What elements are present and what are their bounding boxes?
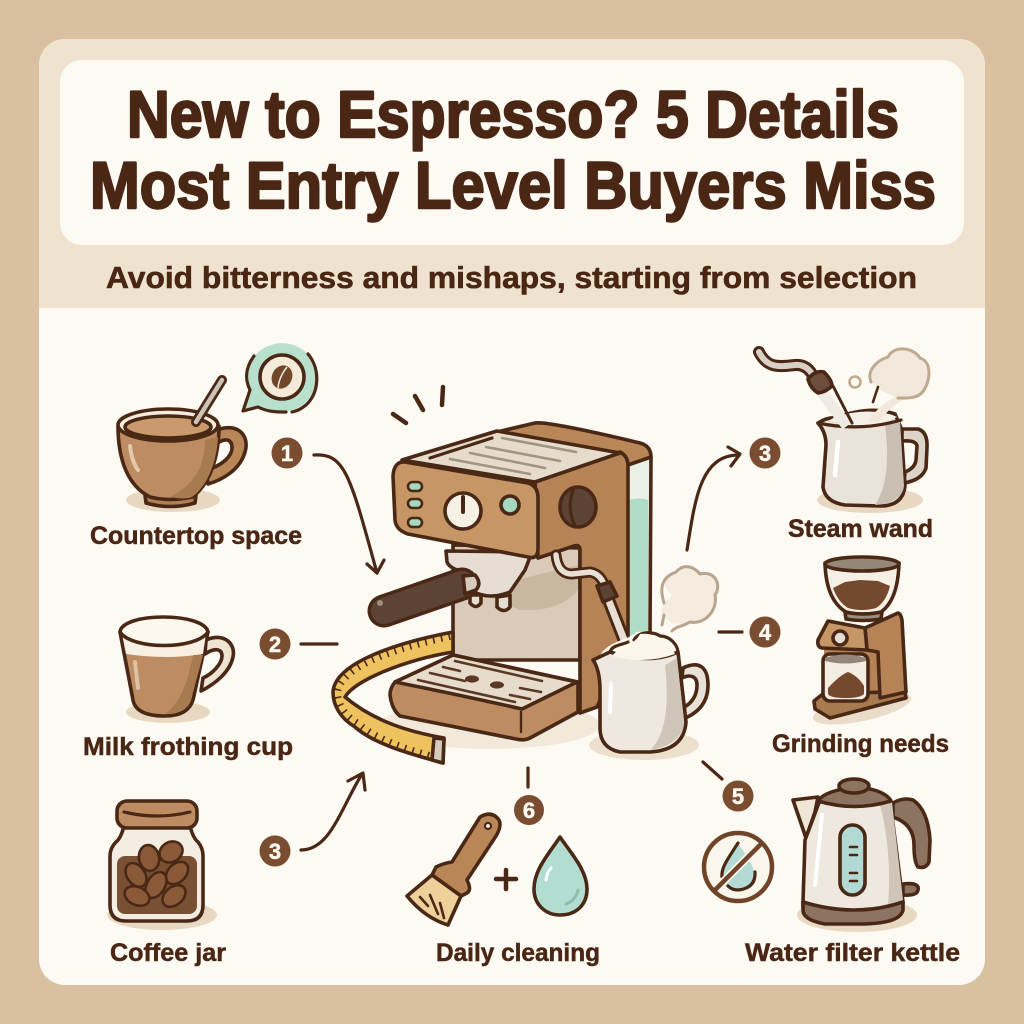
indicator light <box>501 496 519 514</box>
back top <box>497 423 651 465</box>
grinder front <box>818 621 867 650</box>
title box <box>60 60 964 245</box>
label: grinding needs: Grinding needs <box>772 730 949 758</box>
espresso machine shadow <box>380 701 699 760</box>
badge: number 5 <box>722 780 754 812</box>
icon: coffee jar <box>107 801 217 930</box>
icon: water drop <box>534 837 587 915</box>
icon: spark lines <box>393 387 443 423</box>
title: New to Espresso? 5 Details <box>127 77 899 151</box>
front panel <box>393 462 538 558</box>
subtitle: Avoid bitterness and mishaps, starting from selection <box>106 260 917 295</box>
drip tray <box>390 655 578 740</box>
label: water filter kettle: Water filter kettle <box>745 939 960 967</box>
water tank <box>622 457 651 640</box>
badge: number 2 <box>260 628 290 660</box>
icon: grinder <box>810 557 914 731</box>
line: 2 <box>301 642 337 646</box>
portafilter <box>377 575 479 611</box>
badge: number 6: 6 <box>523 798 535 823</box>
badge: number 3 right: 3 <box>759 441 771 466</box>
buttons <box>408 482 422 527</box>
label: daily cleaning: Daily cleaning <box>436 939 600 967</box>
icon: water filter kettle <box>793 779 930 932</box>
badge: number 6 <box>514 795 544 825</box>
machine column <box>535 452 628 713</box>
label: countertop space: Countertop space <box>90 522 302 550</box>
badge: number 2: 2 <box>269 632 281 657</box>
icon: no water sign <box>704 833 772 901</box>
dial <box>445 493 481 529</box>
side knob <box>560 487 596 527</box>
label: milk frothing cup: Milk frothing cup <box>83 733 293 761</box>
badge: number 4: 4 <box>759 620 772 645</box>
steam wand <box>556 555 628 650</box>
icon: frothing pitcher <box>593 632 708 752</box>
line: 4 <box>719 630 742 634</box>
grinder body backing <box>824 648 884 698</box>
badge: number 3 left <box>260 836 290 866</box>
icon: countertop cup <box>118 380 246 512</box>
label: coffee jar: Coffee jar <box>110 939 226 967</box>
badge: number 1 <box>272 438 302 468</box>
badge: number 3 right <box>750 438 780 468</box>
badge: number 4 <box>750 616 780 648</box>
icon: steam wand <box>759 352 852 426</box>
icon: steam wand pitcher <box>817 410 927 513</box>
icon: steam cloud <box>662 567 718 631</box>
line: 6 <box>526 768 530 787</box>
badge: number 5: 5 <box>732 784 744 809</box>
icon: espresso machine <box>377 423 651 740</box>
plus sign <box>496 870 516 889</box>
icon: milk frothing cup <box>120 617 233 723</box>
icon: steam <box>850 349 929 422</box>
icon: brush <box>407 814 500 925</box>
grinder side <box>865 613 906 698</box>
label: steam wand: Steam wand <box>788 515 933 543</box>
arrow: 3 to steam wand <box>687 447 740 550</box>
back panel <box>453 545 580 660</box>
arrow: 3 to tape <box>301 773 365 850</box>
arrow: 1 to machine <box>314 455 384 573</box>
line: 5 <box>703 762 722 779</box>
icon: coffee bean speech bubble <box>243 343 317 412</box>
title <box>90 77 936 222</box>
title: Most Entry Level Buyers Miss <box>90 148 936 222</box>
icon: measuring tape <box>333 632 453 763</box>
badge: number 1: 1 <box>281 441 293 466</box>
grinder base <box>814 692 906 718</box>
group head <box>446 551 532 610</box>
top panel <box>402 431 620 482</box>
badge: number 3 left: 3 <box>269 839 281 864</box>
